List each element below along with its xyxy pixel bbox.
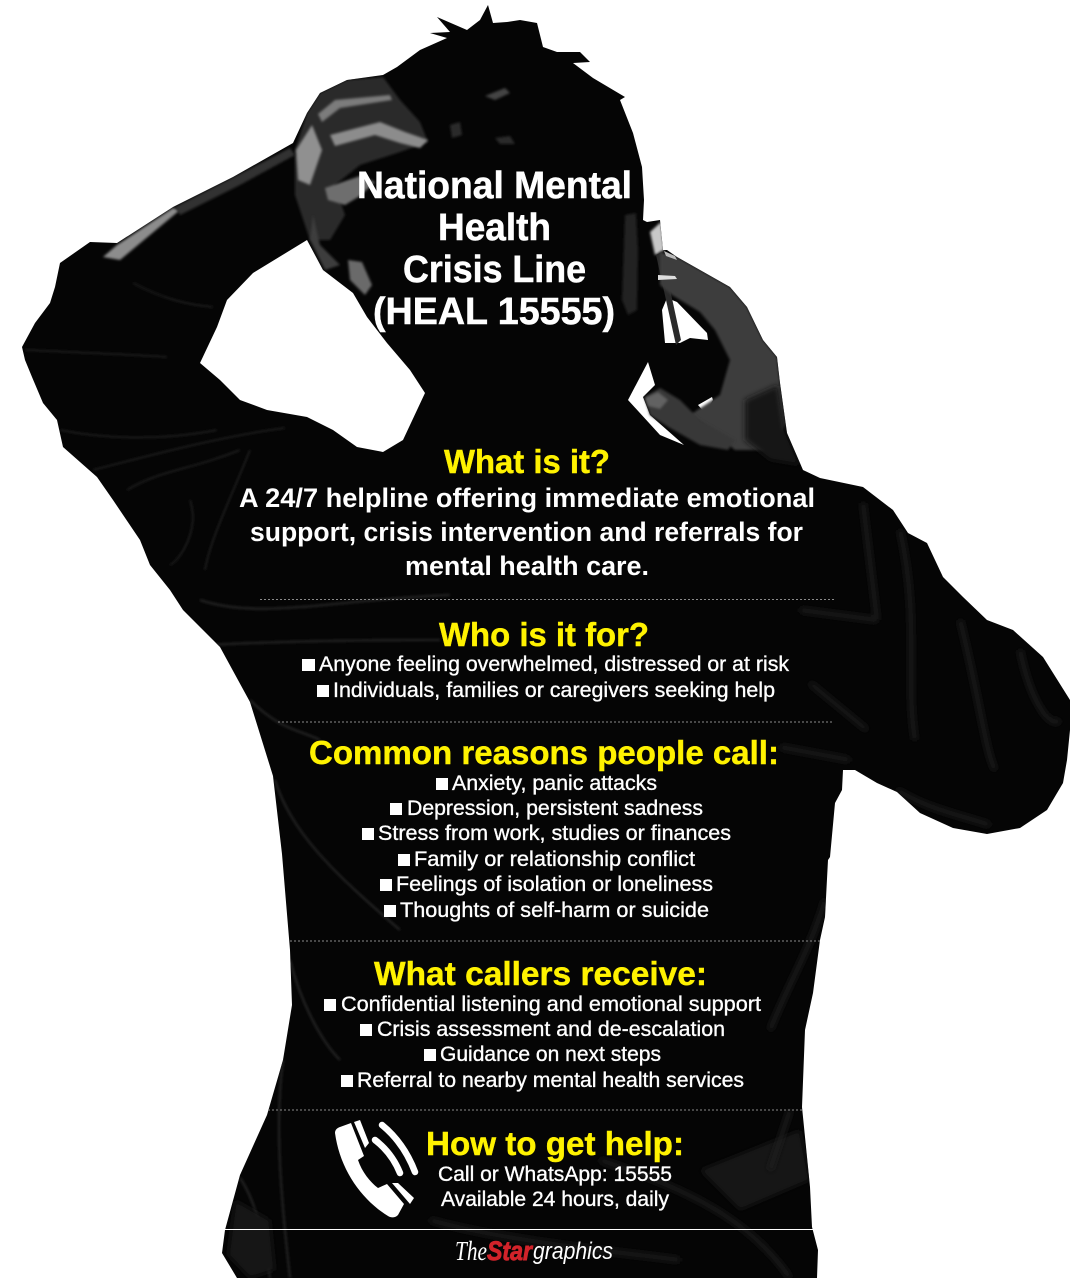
bullet list: reasons: Feelings of isolation or loneliness — [396, 872, 713, 896]
white gap: between left arm and head — [200, 240, 425, 452]
description text: support, crisis intervention and referrals for — [250, 517, 803, 547]
contact details: Call or WhatsApp: 15555 — [438, 1162, 672, 1186]
phone — [650, 222, 664, 255]
section: what callers receive — [324, 955, 761, 1092]
logo: The Star graphics: Star — [487, 1236, 533, 1266]
logo: The Star graphics — [455, 1236, 613, 1266]
forearm highlight — [103, 208, 180, 260]
bullet list: reasons: Depression, persistent sadness — [407, 796, 703, 820]
bullet list: reasons: Stress from work, studies or finances — [378, 821, 731, 845]
section: common reasons — [309, 734, 779, 922]
title: National Mental — [357, 165, 632, 207]
ear — [622, 213, 638, 315]
logo: The Star graphics: The — [455, 1236, 487, 1266]
title: (HEAL 15555) — [373, 291, 615, 333]
bullet list: who: Individuals, families or caregivers seeking help — [333, 678, 775, 702]
bullet list: who: Anyone feeling overwhelmed, distressed or at risk — [319, 652, 789, 676]
section: how to get help — [426, 1125, 684, 1211]
bullet list: receive — [324, 992, 761, 1092]
hair highlights — [485, 88, 510, 100]
heading: who is it for: Who is it for? — [439, 616, 649, 653]
bullet list: receive: Referral to nearby mental health services — [357, 1068, 744, 1092]
bullet list: receive: Crisis assessment and de-escalation — [377, 1017, 725, 1041]
description text — [239, 483, 815, 581]
bullet list: receive: Confidential listening and emotional support — [341, 992, 761, 1016]
right hand — [660, 252, 785, 450]
heading: how to get help: How to get help: — [426, 1125, 684, 1162]
section: what is it — [239, 443, 815, 581]
section: who is it for — [302, 616, 789, 702]
bullet list: reasons — [362, 771, 731, 922]
title: Crisis Line — [403, 249, 586, 291]
heading: what callers receive: What callers receive: — [374, 955, 707, 992]
description text: mental health care. — [405, 551, 649, 581]
title: Health — [438, 207, 551, 249]
contact details: Available 24 hours, daily — [441, 1187, 669, 1211]
white gap: between neck, thumb and collar — [628, 362, 684, 445]
bullet list: reasons: Anxiety, panic attacks — [452, 771, 657, 795]
white gap: inside hand — [698, 397, 713, 413]
title — [357, 165, 632, 333]
shirt folds on sleeves — [25, 283, 285, 570]
bullet list: reasons: Family or relationship conflict — [414, 847, 695, 871]
bullet list: reasons: Thoughts of self-harm or suicide — [400, 898, 709, 922]
bullet list: receive: Guidance on next steps — [440, 1042, 661, 1066]
logo: The Star graphics: graphics — [533, 1238, 613, 1265]
fist — [295, 77, 428, 240]
description text: A 24/7 helpline offering immediate emotional — [239, 483, 815, 513]
heading: common reasons: Common reasons people call: — [309, 734, 779, 771]
icon: telephone with signal waves — [335, 1120, 415, 1217]
white gap: between phone and hand — [662, 298, 708, 343]
bullet list: who — [302, 652, 789, 702]
contact details — [438, 1162, 672, 1211]
heading: what is it: What is it? — [444, 443, 610, 480]
